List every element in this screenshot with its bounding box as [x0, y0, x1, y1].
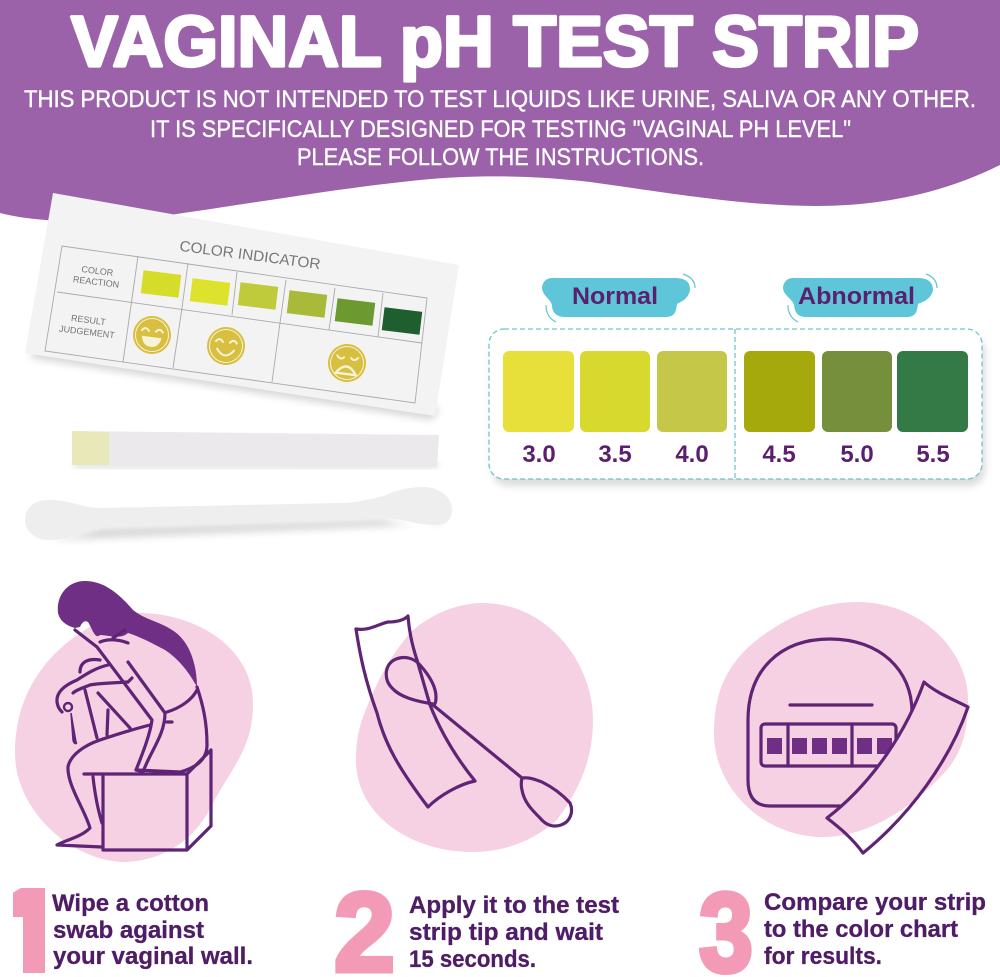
swatch 4.5: 4.5	[762, 441, 796, 468]
icon: color card	[748, 639, 912, 806]
chart shadow	[492, 336, 985, 486]
card color swatches	[141, 270, 422, 335]
row label: result judgement: RESULT	[70, 313, 107, 327]
row label: color reaction: REACTION	[72, 274, 120, 290]
pink blob	[714, 602, 968, 837]
badge: abnormal: Abnormal	[798, 283, 915, 310]
step 3 caption	[699, 870, 986, 977]
row label: result judgement: JUDGEMENT	[59, 324, 116, 340]
strip reagent tip	[72, 431, 109, 465]
step 2 illustration	[356, 603, 593, 852]
purple wave background	[0, 0, 1000, 221]
step 1 illustration	[15, 581, 253, 862]
swatch 3.5: 3.5	[598, 441, 632, 468]
box seat	[103, 750, 211, 850]
icon: sad face	[326, 342, 368, 384]
badge: normal: Normal	[572, 283, 658, 310]
product photo: cotton swab	[25, 487, 452, 540]
pink blob	[15, 613, 253, 862]
step 1 text: Wipe a cotton	[52, 890, 209, 917]
step 1 caption: your vaginal wall.	[53, 943, 253, 970]
chart dashed frame	[489, 329, 982, 479]
swatch 5.0	[822, 351, 892, 468]
swatch 3.5	[580, 351, 650, 468]
header banner	[0, 0, 1000, 221]
subtitle line 2: IT IS SPECIFICALLY DESIGNED FOR TESTING "VAGINAL PH LEVEL"	[150, 116, 851, 143]
subtitle line 3: PLEASE FOLLOW THE INSTRUCTIONS.	[297, 144, 704, 171]
pH color chart panel	[489, 274, 985, 486]
card body	[25, 193, 459, 416]
row label: color reaction: COLOR	[81, 264, 114, 278]
icon: seated woman with swab	[57, 581, 211, 850]
badge: normal	[542, 274, 695, 322]
step 2 caption: strip tip and wait	[409, 919, 603, 946]
step 3 caption: to the color chart	[764, 916, 958, 943]
icon: smile face	[205, 325, 247, 367]
product photo: test strip	[72, 431, 439, 468]
chart divider	[734, 329, 736, 479]
pink blob	[356, 603, 593, 852]
card heading: COLOR INDICATOR	[178, 238, 322, 273]
swatch 5.5	[897, 351, 968, 468]
icon: test strip	[356, 616, 475, 807]
badge: abnormal	[783, 274, 937, 322]
step 1 caption: swab against	[53, 917, 204, 944]
step 2 caption	[334, 870, 619, 977]
card table lines	[45, 246, 427, 403]
step 3 caption: for results.	[764, 943, 882, 970]
step 3 illustration	[714, 602, 968, 853]
step 2 caption: 15 seconds.	[409, 946, 536, 973]
step 3 text: Compare your strip	[764, 889, 986, 916]
icon: swab	[386, 658, 572, 826]
swatch 4.0	[657, 351, 727, 468]
swatch 4.5	[744, 351, 815, 468]
swatch 3.0: 3.0	[522, 441, 556, 468]
icon: big smile face	[131, 314, 173, 356]
icon: strip overlay	[827, 682, 968, 853]
swatch 5.5: 5.5	[916, 441, 950, 468]
step 1 caption	[13, 888, 252, 973]
swatch 5.0: 5.0	[840, 441, 874, 468]
swatch 3.0	[503, 351, 574, 468]
swatch 4.0: 4.0	[675, 441, 709, 468]
product photo: color indicator card	[25, 193, 459, 420]
title: VAGINAL pH TEST STRIP	[71, 3, 919, 82]
strip body	[72, 431, 439, 467]
step 2 text: Apply it to the test	[409, 892, 619, 919]
